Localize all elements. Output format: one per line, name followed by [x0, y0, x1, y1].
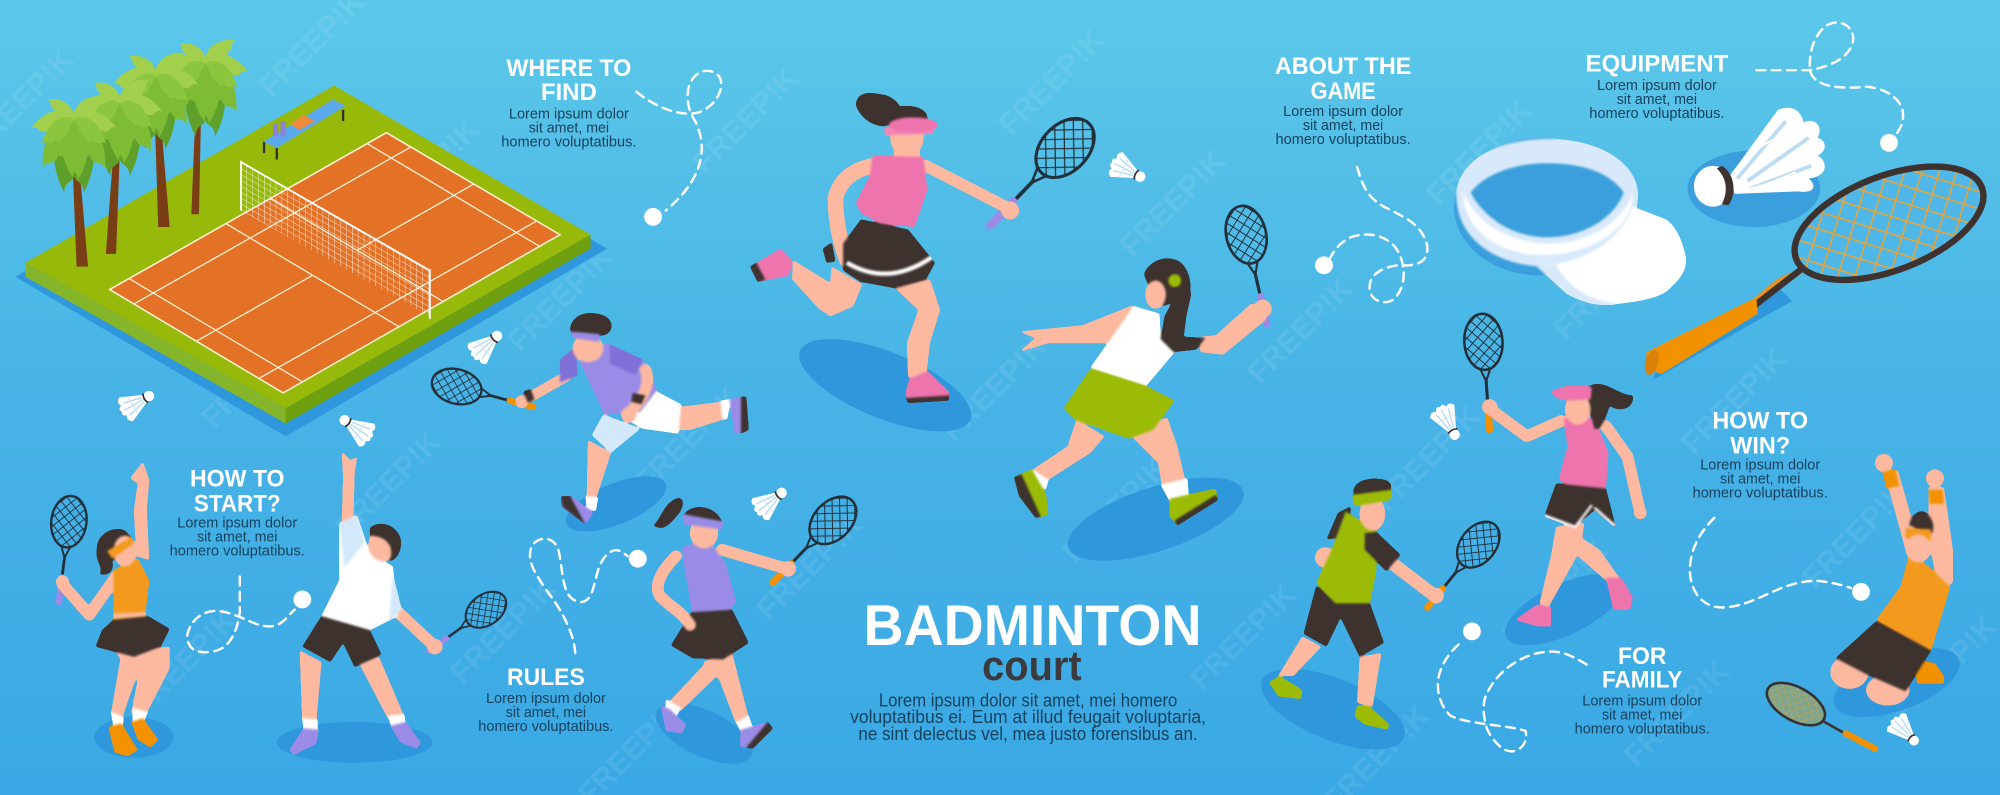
watermark: FREEP!K — [501, 240, 620, 359]
text: where to find: FIND — [541, 79, 597, 106]
watermark: FREEP!K — [1796, 475, 1915, 595]
icon: racket on the ground — [1760, 674, 1875, 749]
dashed path: for family — [1438, 622, 1587, 751]
text: how to win: sit amet, mei — [1720, 471, 1800, 487]
text: where to find: homero voluptatibus. — [501, 135, 636, 151]
text: for family: Lorem ipsum dolor — [1582, 693, 1702, 709]
dashed path: how to start — [187, 577, 311, 652]
figure: man in white shirt — [277, 452, 513, 763]
shuttlecocks: small — [114, 150, 1927, 753]
watermark: FREEP!K — [1241, 271, 1360, 390]
watermark: FREEP!K — [935, 329, 1054, 448]
watermark: FREEP!K — [750, 507, 869, 626]
palm trees — [32, 33, 248, 267]
text: how to start: homero voluptatibus. — [170, 543, 305, 559]
dashed path: equipment — [1756, 23, 1903, 152]
text: how to start — [170, 466, 305, 559]
watermark: FREEP!K — [1183, 578, 1302, 697]
icon: visor — [1454, 138, 1686, 305]
text: equipment: EQUIPMENT — [1585, 50, 1729, 77]
watermark: FREEP!K — [125, 603, 244, 722]
watermark: FREEP!K — [1547, 227, 1666, 346]
title: ne sint delectus vel, mea justo forensibus an. — [858, 723, 1198, 744]
text: for family: FAMILY — [1602, 666, 1682, 693]
figure: kneeling man celebrating — [1825, 454, 1969, 731]
figure: pink running woman — [750, 93, 1106, 450]
bench — [263, 99, 346, 159]
text: how to start: START? — [194, 490, 281, 517]
title — [850, 594, 1206, 744]
text: equipment: homero voluptatibus. — [1589, 106, 1724, 122]
text: for family: homero voluptatibus. — [1575, 721, 1710, 737]
watermark: FREEP!K — [367, 112, 486, 231]
text: how to win: homero voluptatibus. — [1693, 485, 1828, 501]
title: Lorem ipsum dolor sit amet, mei homero — [879, 690, 1177, 711]
title: BADMINTON — [864, 594, 1202, 658]
text: where to find: sit amet, mei — [529, 121, 609, 137]
watermark: FREEP!K — [195, 316, 314, 435]
text: how to win: HOW TO — [1712, 408, 1808, 435]
watermark: FREEP!K — [1368, 399, 1487, 518]
watermark: FREEP!K — [992, 23, 1111, 142]
text: how to win: Lorem ipsum dolor — [1700, 457, 1820, 473]
figure: woman in white top and green skirt — [1014, 202, 1286, 578]
panel: court island — [15, 33, 607, 436]
text: equipment — [1585, 50, 1729, 122]
text: how to win — [1693, 408, 1828, 501]
text: how to start: Lorem ipsum dolor — [177, 515, 297, 531]
text: equipment: sit amet, mei — [1617, 92, 1697, 108]
watermark: FREEP!K — [444, 571, 563, 690]
watermark: FREEP!K — [1056, 450, 1175, 569]
text: rules — [478, 664, 614, 735]
text: for family: FOR — [1618, 643, 1666, 670]
title: court — [982, 642, 1082, 689]
dashed path: where to find — [636, 71, 721, 226]
dashed path: rules — [530, 539, 647, 653]
text: about the game: GAME — [1311, 78, 1376, 105]
text: where to find: WHERE TO — [506, 55, 631, 82]
watermark: FREEP!K — [1674, 342, 1794, 461]
text: where to find — [501, 55, 636, 151]
title: voluptatibus ei. Eum at illud feugait voluptaria, — [850, 706, 1206, 727]
court surface — [110, 133, 560, 393]
watermark: FREEP!K — [686, 61, 805, 180]
figure: man in green shirt — [1250, 479, 1508, 766]
icon: large shuttlecock — [1688, 108, 1825, 227]
text: about the game: sit amet, mei — [1303, 118, 1383, 134]
text: for family: sit amet, mei — [1602, 707, 1682, 723]
figure: woman in orange top — [42, 462, 173, 758]
text: rules: homero voluptatibus. — [478, 719, 614, 735]
dashed path: how to win — [1690, 518, 1870, 608]
text: for family — [1575, 643, 1710, 737]
text: how to start: sit amet, mei — [197, 529, 277, 545]
net — [241, 161, 430, 319]
text: where to find: Lorem ipsum dolor — [509, 107, 629, 123]
text: about the game: homero voluptatibus. — [1276, 132, 1411, 148]
watermark: FREEP!K — [329, 424, 448, 544]
watermark: FREEP!K — [1617, 654, 1736, 773]
watermark: FREEP!K — [1113, 144, 1232, 263]
text: rules: Lorem ipsum dolor — [486, 691, 606, 707]
watermark: FREEP!K — [629, 380, 748, 499]
text: about the game: Lorem ipsum dolor — [1283, 104, 1403, 120]
watermark: FREEP!K — [61, 189, 180, 308]
text: how to start: HOW TO — [190, 466, 284, 493]
figure: man in purple shirt — [428, 313, 749, 543]
watermark: FREEP!K — [1496, 533, 1615, 652]
dashed path: about the game — [1315, 167, 1427, 302]
text: how to win: WIN? — [1730, 432, 1790, 459]
watermark: FREEP!K — [1419, 93, 1538, 212]
text: about the game: ABOUT THE — [1275, 53, 1411, 80]
figure: woman in purple top — [647, 488, 865, 776]
figure: woman in pink top — [1462, 313, 1647, 660]
text: rules: sit amet, mei — [506, 705, 586, 721]
text: about the game — [1275, 53, 1411, 148]
text: equipment: Lorem ipsum dolor — [1597, 78, 1717, 94]
text: rules: RULES — [507, 664, 585, 691]
icon: large racket — [1642, 144, 1999, 380]
